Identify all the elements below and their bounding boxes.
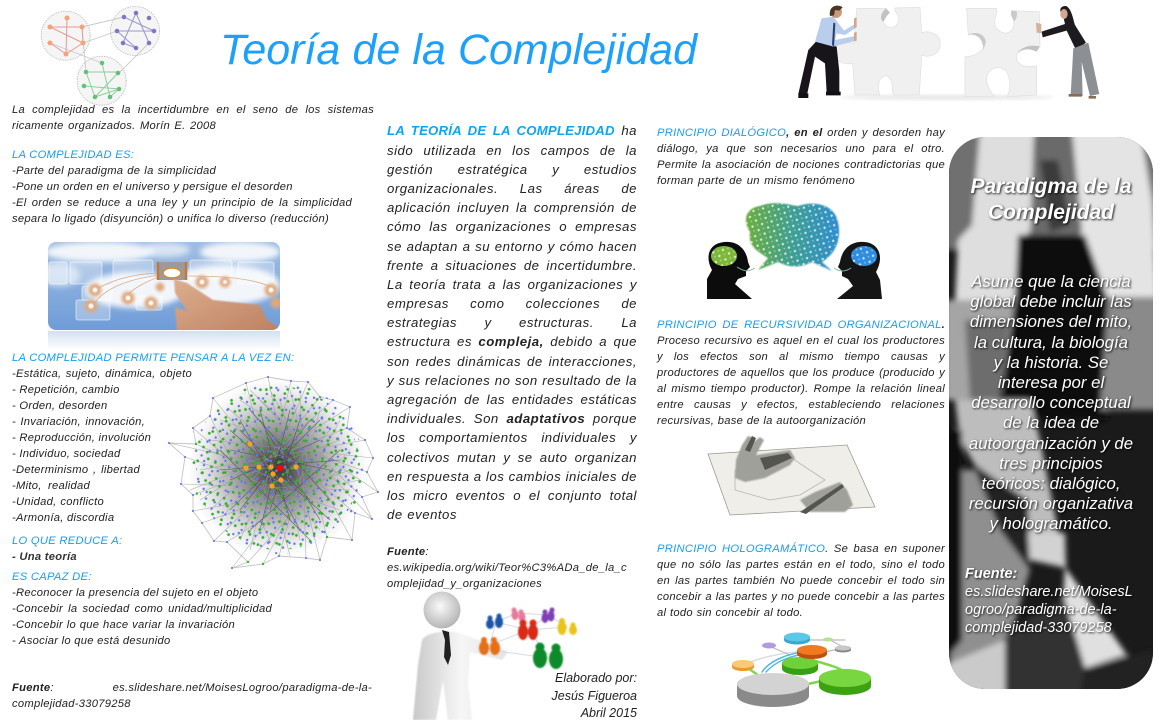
text block: la teoria de la complejidad: de eventos	[387, 507, 457, 522]
text block: fuente column 2: Fuente:	[387, 546, 429, 558]
text block: la teoria de la complejidad: organizacionales. Las áreas de	[387, 181, 637, 196]
panel: photo background of paradigm panel	[945, 130, 1160, 695]
text block: la teoria de la complejidad: colectivos mutan y se auto organizan	[387, 450, 637, 465]
text block: la complejidad permite pensar: -Mito, realidad	[12, 480, 90, 492]
text block: la complejidad permite pensar: -Estática, sujeto, dinámica, objeto	[12, 368, 192, 380]
text block: la complejidad permite pensar: -Armonía, discordia	[12, 512, 114, 524]
text block: panel body: global debe incluir las	[970, 292, 1132, 311]
text block: principio hologramatico	[657, 542, 946, 619]
text block: la teoria de la complejidad: y sus relaciones no son resultado de la	[387, 373, 637, 388]
text block: definition of complexity: La complejidad es la incertidumbre en el seno de los sistemas	[12, 104, 374, 116]
text block: la complejidad permite pensar: - Individuo, sociedad	[12, 448, 120, 460]
man	[798, 42, 839, 94]
text block: la complejidad es	[12, 149, 352, 225]
title: Teoría de la Complejidad	[220, 26, 697, 74]
text block: la complejidad permite pensar	[12, 352, 294, 524]
text block: panel body: interesa por el	[998, 373, 1104, 392]
text block: definition of complexity	[12, 104, 374, 132]
text block: panel body: Asume que la ciencia	[971, 272, 1131, 291]
text block: la complejidad es: LA COMPLEJIDAD ES:	[12, 149, 134, 161]
text block: panel body: teóricos: dialógico,	[982, 474, 1120, 493]
text block: principio dialogico	[657, 126, 946, 187]
text block: la complejidad es: -Parte del paradigma de la simplicidad	[12, 165, 216, 177]
text block: panel body: dimensiones del mito,	[970, 312, 1132, 331]
text block: la complejidad es: -El orden se reduce a una ley y un principio de la simplicidad	[12, 197, 352, 209]
text block: principio de recursividad organizacional: productores de aquellos que los produce (producido y	[657, 367, 945, 379]
heading: paradigma de la complejidad: Complejidad	[988, 201, 1114, 224]
image: Escher drawing hands	[708, 436, 875, 515]
text block: la teoria de la complejidad: frente a situaciones de incertidumbre.	[387, 258, 637, 273]
text block: la teoria de la complejidad: son redes dinámicas de interacciones,	[387, 354, 637, 369]
text block: la complejidad permite pensar: -Determinismo , libertad	[12, 464, 140, 476]
text block: principio de recursividad organizacional: al mismo tiempo productor). Rompe la relación lineal	[657, 383, 945, 395]
text block: principio hologramatico: en las partes también No puede concebir el todo sin	[657, 575, 945, 587]
text block: author credit	[552, 671, 637, 720]
text block: principio de recursividad organizacional: recursivas, base de la autoorganización	[657, 415, 866, 427]
text block: fuente column 1: complejidad-33079258	[12, 698, 131, 710]
text block: author credit: Jesús Figueroa	[552, 688, 637, 702]
text block: lo que reduce a: - Una teoría	[12, 551, 77, 563]
text block: es capaz de	[12, 571, 272, 647]
text block: panel fuente	[965, 566, 1133, 637]
woman	[1042, 6, 1086, 50]
text block: la teoria de la complejidad: aplicación incluyen la comprensión de	[387, 200, 637, 215]
text block: la teoria de la complejidad: sido utilizada en los campos de la	[387, 143, 637, 158]
text block: la teoria de la complejidad: LA TEORÍA DE LA COMPLEJIDAD ha	[387, 123, 637, 138]
text block: author credit: Abril 2015	[581, 706, 637, 720]
text block: panel body: recursión organizativa	[969, 494, 1133, 513]
text block: la teoria de la complejidad: los comportamientos individuales y	[387, 430, 637, 445]
text block: es capaz de: -Concebir lo que hace variar la invariación	[12, 619, 235, 631]
text block: principio dialogico: Permite la asociación de nociones contradictorias que	[657, 159, 945, 171]
text block: la teoria de la complejidad: gestión estratégica y estudios	[387, 162, 637, 177]
text block: principio hologramatico: concebir a las partes y no puede concebir a las partes	[657, 591, 945, 603]
image: hand touching cloud interface	[40, 242, 282, 350]
text block: definition of complexity: ricamente organizados. Morín E. 2008	[12, 120, 216, 132]
text block: la teoria de la complejidad: cómo las organizaciones o empresas	[387, 219, 637, 234]
image: two heads in dialogue with thought cloud	[707, 203, 882, 299]
text block: la teoria de la complejidad: se adaptan a su entorno y cómo hacen	[387, 239, 637, 254]
text block: principio hologramatico: que no sólo las partes están en el todo, sino el todo	[657, 559, 945, 571]
text block: la teoria de la complejidad: estructura es compleja, debido a que	[387, 334, 637, 349]
text block: es capaz de: ES CAPAZ DE:	[12, 571, 92, 583]
text block: panel fuente: complejidad-33079258	[965, 620, 1112, 636]
text block: fuente column 2: es.wikipedia.org/wiki/Teor%C3%ADa_de_la_c	[387, 562, 627, 574]
text block: panel fuente: Fuente:	[965, 566, 1017, 582]
chart: dense network graph	[169, 377, 378, 568]
text block: panel fuente: ogroo/paradigma-de-la-	[965, 602, 1117, 618]
text block: la complejidad permite pensar: - Repetición, cambio	[12, 384, 120, 396]
text block: panel body	[968, 272, 1134, 535]
text block: es capaz de: -Concebir la sociedad como unidad/multiplicidad	[12, 603, 272, 615]
heading: paradigma de la complejidad	[970, 175, 1134, 226]
text block: principio dialogico: diálogo, ya que son necesarios uno para el otro.	[657, 143, 945, 155]
text block: la complejidad es: separa lo ligado (disyunción) o unifica lo diverso (reducción)	[12, 213, 329, 225]
text block: fuente column 2	[387, 546, 627, 590]
text block: principio de recursividad organizacional: Proceso recursivo es aquel en el cual los productores	[657, 335, 945, 347]
text block: principio hologramatico: al todo sin concebir al todo.	[657, 607, 803, 619]
text block: fuente column 1: Fuente: es.slideshare.net/MoisesLogroo/paradigma-de-la-	[12, 682, 372, 694]
text block: la complejidad permite pensar: -Unidad, conflicto	[12, 496, 104, 508]
text block: la teoria de la complejidad: agregación de las entidades estáticas	[387, 392, 637, 407]
text block: panel body: de la idea de	[1003, 413, 1099, 432]
text block: la teoria de la complejidad: La teoría trata a las organizaciones y	[387, 277, 637, 292]
text block: principio dialogico: forman parte de un mismo fenómeno	[657, 175, 855, 187]
text block: principio de recursividad organizacional: y los efectos son al mismo tiempo causas y	[657, 351, 945, 363]
text block: panel body: tres principios	[999, 454, 1103, 473]
image: connected 3D discs	[732, 632, 871, 707]
icon: three connected network communities	[41, 6, 160, 105]
text block: author credit: Elaborado por:	[555, 671, 637, 685]
text block: la teoria de la complejidad: estrategias y estructuras. La	[387, 315, 637, 330]
text block: la complejidad permite pensar: - Reproducción, involución	[12, 432, 151, 444]
text block: la complejidad permite pensar: - Invariación, innovación,	[12, 416, 145, 428]
text block: panel body: la cultura, la biología	[974, 333, 1128, 352]
heading: paradigma de la complejidad: Paradigma de la	[970, 175, 1132, 198]
image: white 3D man presenting team network	[413, 592, 577, 720]
text block: panel fuente: es.slideshare.net/MoisesL	[965, 584, 1133, 600]
text block: fuente column 1	[12, 682, 372, 710]
text block: panel body: autoorganización y de	[969, 434, 1133, 452]
text block: es capaz de: - Asociar lo que está desunido	[12, 635, 170, 647]
text block: lo que reduce a	[12, 535, 122, 563]
text block: panel body: y hologramático.	[989, 514, 1113, 533]
text block: principio hologramatico: PRINCIPIO HOLOGRAMÁTICO. Se basa en suponer	[657, 543, 945, 555]
text block: principio dialogico: PRINCIPIO DIALÓGICO, en el orden y desorden hay	[657, 127, 945, 139]
image: business people pushing puzzle pieces	[798, 6, 1099, 100]
text block: principio de recursividad organizacional: PRINCIPIO DE RECURSIVIDAD ORGANIZACIONAL.	[657, 319, 945, 331]
text block: la teoria de la complejidad: empresas como colecciones de	[387, 296, 637, 311]
text block: la complejidad es: -Pone un orden en el universo y persigue el desorden	[12, 181, 293, 193]
text block: lo que reduce a: LO QUE REDUCE A:	[12, 535, 122, 547]
text block: principio de recursividad organizacional: entre causas y efectos, estableciendo relaciones	[657, 399, 945, 411]
text block: la complejidad permite pensar: - Orden, desorden	[12, 400, 108, 412]
text block: la teoria de la complejidad	[386, 123, 638, 522]
text block: es capaz de: -Reconocer la presencia del sujeto en el objeto	[12, 587, 258, 599]
text block: fuente column 2: omplejidad_y_organizaciones	[387, 578, 542, 590]
text block: panel body: desarrollo conceptual	[971, 393, 1131, 412]
text block: principio de recursividad organizacional	[656, 319, 946, 427]
text block: la teoria de la complejidad: en respuesta a los cambios iniciales de	[387, 469, 637, 484]
text block: la teoria de la complejidad: los micro eventos o el conjunto total	[387, 488, 637, 503]
text block: la complejidad permite pensar: LA COMPLEJIDAD PERMITE PENSAR A LA VEZ EN:	[12, 352, 294, 364]
text block: panel body: y la historia. Se	[994, 353, 1108, 372]
text block: la teoria de la complejidad: individuales. Son adaptativos porque	[387, 411, 637, 426]
